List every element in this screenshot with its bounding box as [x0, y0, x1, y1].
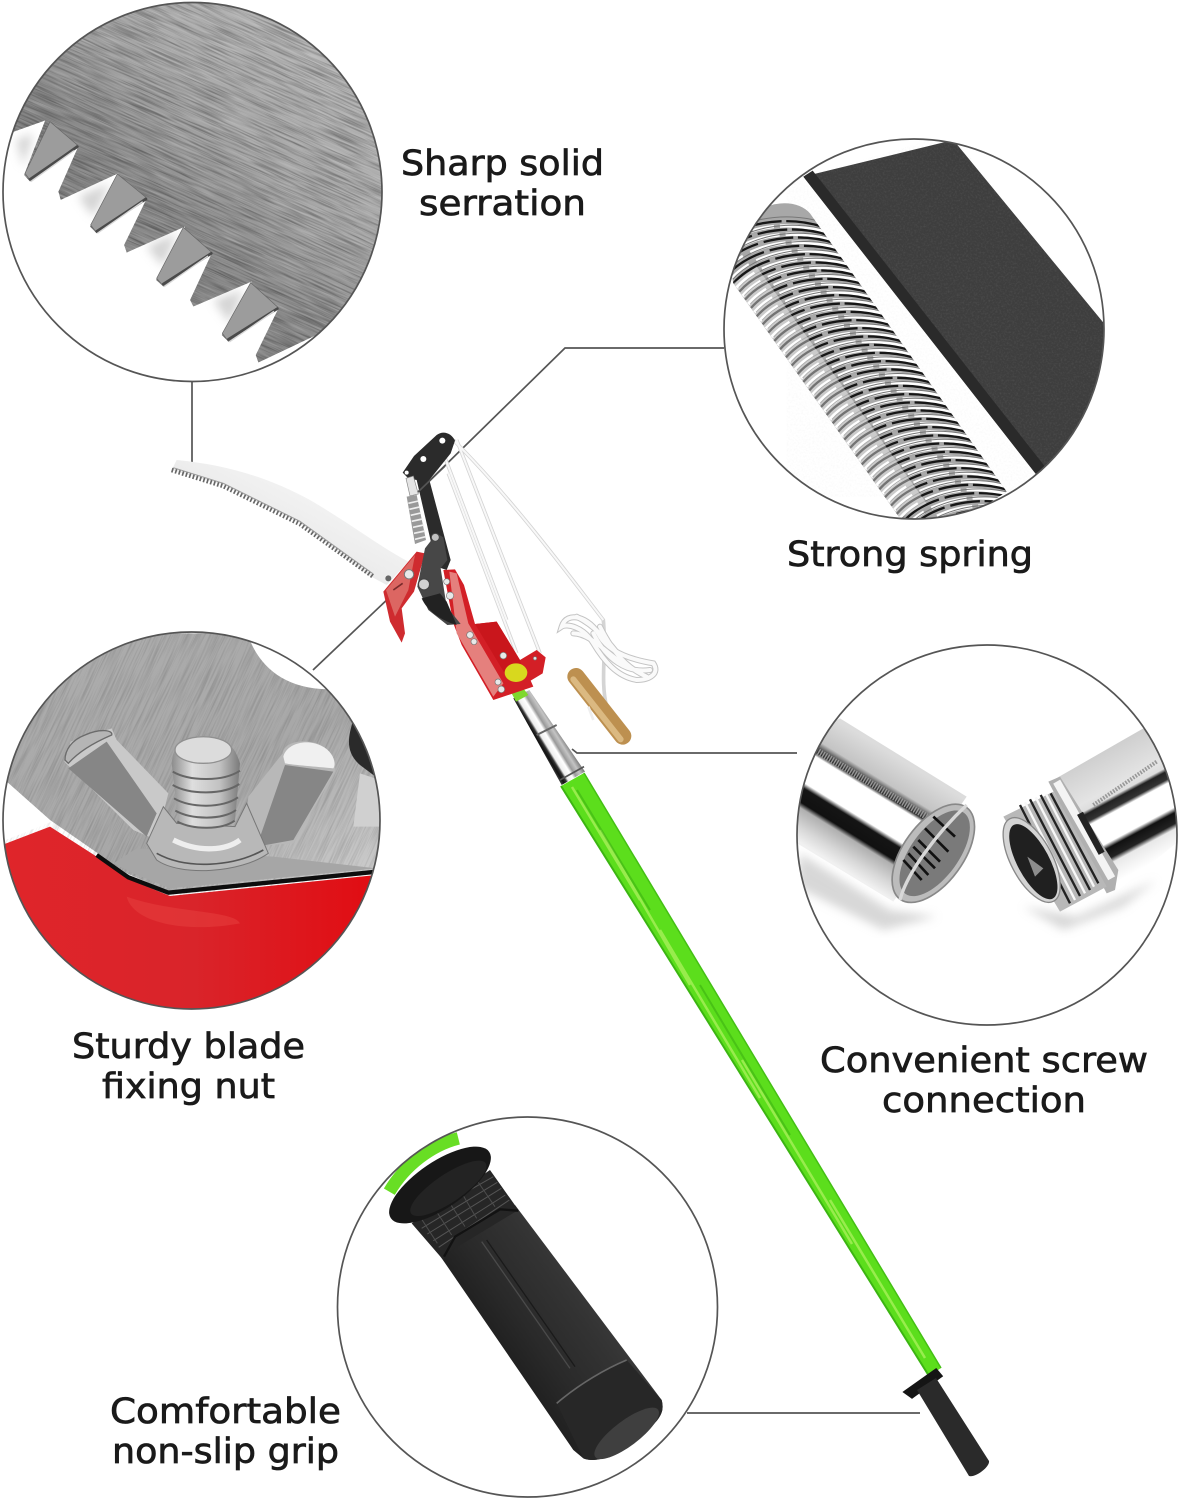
wing nut right wing [243, 741, 335, 847]
ribbed collar [412, 1170, 518, 1260]
steel spring coils [732, 203, 1006, 518]
label: strong spring: Strong spring [787, 535, 1033, 575]
label: sturdy blade fixing nut [72, 1027, 305, 1107]
panel: non-slip grip close-up [338, 1117, 718, 1497]
cutting blade [417, 533, 461, 625]
pole grip [905, 1370, 989, 1476]
plate edge shadow [97, 855, 377, 893]
green pole end [389, 1138, 458, 1192]
steel plate [6, 633, 380, 896]
green telescopic pole [561, 773, 941, 1376]
label: sharp solid serration: Sharp solid [401, 144, 604, 184]
white gap [4, 782, 51, 840]
label: sturdy blade fixing nut: Sturdy blade [72, 1027, 305, 1067]
wing nut base [147, 803, 268, 871]
label: sharp solid serration [401, 144, 604, 224]
red handle body [5, 826, 371, 1008]
label: convenient screw connection [820, 1041, 1148, 1121]
label: sharp solid serration: serration [419, 184, 586, 224]
panel: blade fixing nut close-up [2, 631, 381, 1010]
chrome telescopic collar [512, 688, 585, 785]
leader line tip over tool [418, 466, 445, 492]
threaded bolt [172, 736, 240, 828]
soft shadows [797, 853, 1157, 930]
panel: strong spring close-up [723, 138, 1105, 520]
tooth shadows [17, 133, 243, 323]
label: convenient screw connection: connection [882, 1081, 1086, 1121]
black lever arm [403, 433, 455, 570]
label: comfortable non-slip grip [110, 1392, 341, 1472]
dark lever arm [803, 142, 1104, 474]
pull ropes [443, 440, 607, 707]
panel: saw serration close-up [2, 2, 383, 382]
grip body [438, 1205, 663, 1460]
extension spring [406, 476, 426, 544]
white cut-away below teeth [4, 120, 314, 381]
label: comfortable non-slip grip: Comfortable [110, 1392, 341, 1432]
wooden handle [573, 677, 623, 739]
coil of rope [562, 617, 655, 680]
saw blade with teeth [0, 0, 400, 363]
red hook jaw [383, 552, 425, 643]
red handle body [443, 569, 546, 700]
flange [389, 1146, 491, 1224]
label: comfortable non-slip grip: non-slip grip [112, 1432, 339, 1472]
label: sturdy blade fixing nut: fixing nut [102, 1067, 275, 1107]
panel: screw connection close-up [783, 645, 1181, 1025]
tooth bevels [25, 122, 278, 341]
label: convenient screw connection: Convenient screw [820, 1041, 1148, 1081]
wing nut left wing [64, 728, 168, 840]
male threaded tube section [1002, 728, 1176, 912]
female tube section [798, 718, 976, 904]
pruner and saw head [172, 433, 655, 785]
curved saw blade [172, 460, 408, 585]
end cap [557, 1360, 666, 1467]
leader lines [192, 348, 920, 1413]
brushed steel texture [14, 4, 382, 362]
